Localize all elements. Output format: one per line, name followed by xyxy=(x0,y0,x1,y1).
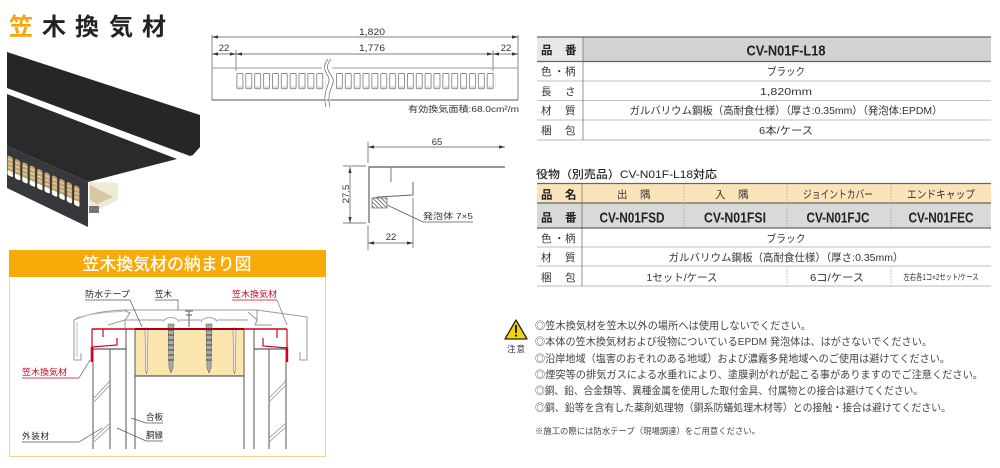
label: exterior: 外装材 xyxy=(22,431,49,441)
dimension drawing: section xyxy=(341,137,505,250)
product photo xyxy=(7,52,200,227)
effective vent area: 有効換気面積:68.0cm²/m xyxy=(408,104,519,114)
screws and nails xyxy=(145,324,236,374)
table: accessories heading: 役物（別売品）CV-N01F-L18対応 xyxy=(536,167,717,181)
title: 気 xyxy=(109,14,133,41)
dimension drawing: section: 発泡体 7×5 xyxy=(423,211,473,221)
table: main product spec: ブラック xyxy=(767,65,805,78)
caution notes: ◎沿岸地域（塩害のおそれのある地域）および濃霧多発地域へのご使用は避けてください。 xyxy=(535,352,950,365)
dimension drawing: section: 27.5 xyxy=(341,185,352,203)
table: main product spec: 番 xyxy=(565,44,577,57)
table: accessories: 隅 xyxy=(640,189,650,201)
table: main product spec: 6本/ケース xyxy=(759,124,813,137)
icon: caution triangle: 注意 xyxy=(507,344,525,354)
caution notes: ◎本体の笠木換気材および役物についているEPDM 発泡体は、はがさないでください。 xyxy=(535,335,932,348)
table: main product spec: 材 xyxy=(541,104,552,117)
panel heading: 笠木換気材の納まり図 xyxy=(82,255,252,274)
caution notes: ◎煙突等の排気ガスによる水垂れにより、塗膜剥がれが起こる事がありますのでご注意ください。 xyxy=(535,368,983,381)
table: main product spec: 品 xyxy=(541,44,552,57)
table: accessories: 番 xyxy=(565,212,577,224)
caution notes: ◎銅、鉛、合金類等、異種金属を使用した取付金具、付属物との接合は避けてください。 xyxy=(535,384,923,397)
panel heading xyxy=(9,250,326,277)
dimension drawing: top view: 1,820 xyxy=(359,27,385,38)
label: plywood: 合板 xyxy=(146,412,164,422)
table: main product spec xyxy=(537,37,991,140)
title: 材 xyxy=(142,14,166,41)
caution notes: ◎笠木換気材を笠木以外の場所へは使用しないでください。 xyxy=(535,319,811,332)
caution notes xyxy=(535,319,983,414)
label: vent member right: 笠木換気材 xyxy=(232,289,278,299)
panel: installation diagram xyxy=(9,250,326,456)
table: accessories: CV-N01FEC xyxy=(908,210,974,226)
table: accessories: 材 xyxy=(541,251,552,264)
red vent member xyxy=(92,329,287,362)
table: main product spec: 長 xyxy=(541,86,552,98)
table: accessories: 包 xyxy=(565,271,576,284)
table: accessories xyxy=(537,183,991,286)
icon: caution triangle xyxy=(505,320,527,354)
table: accessories: ガルバリウム鋼板（高耐食仕様）（厚さ:0.35mm） xyxy=(668,251,904,264)
table: accessories: ジョイントカバー xyxy=(803,188,873,201)
label: vent member left: 笠木換気材 xyxy=(22,367,68,377)
table: accessories: ブラック xyxy=(766,232,806,245)
table: main product spec: 色 xyxy=(541,66,552,78)
title: 木 xyxy=(42,14,66,41)
table: accessories: ・ xyxy=(554,233,564,245)
footnote: ※施工の際には防水テープ（現場調達）をご用意ください。 xyxy=(535,426,760,436)
table: accessories: 出 xyxy=(617,189,628,201)
table: accessories: CV-N01FSD xyxy=(600,210,665,226)
table: main product spec: ・ xyxy=(554,66,564,78)
dimension drawing: top view: 22 xyxy=(219,43,229,54)
title: 換 xyxy=(75,14,99,41)
dimension drawing: section: 65 xyxy=(432,137,442,148)
dimension drawing: section: 22 xyxy=(386,232,396,243)
dimension drawing: top view: 22 xyxy=(501,43,511,54)
dimension drawing: top view: 1,776 xyxy=(359,43,385,54)
table: accessories: CV-N01FSI xyxy=(704,210,766,226)
table: main product spec: 梱 xyxy=(541,124,552,137)
table: accessories: 6コ/ケース xyxy=(810,272,864,284)
table: main product spec: CV-N01F-L18 xyxy=(746,42,826,60)
table: accessories: 梱 xyxy=(541,271,552,284)
table: main product spec: 質 xyxy=(565,104,576,117)
dimension drawing: top view xyxy=(212,27,519,114)
table: accessories: 入 xyxy=(715,189,726,201)
table: accessories: 1セット/ケース xyxy=(646,272,718,284)
table: accessories: 質 xyxy=(565,251,576,264)
caution notes: ◎銅、鉛等を含有した薬剤処理物（銅系防蟻処理木材等）との接触・接合は避けてください。 xyxy=(535,401,951,414)
table: accessories: 柄 xyxy=(565,232,576,245)
label: furring: 胴縁 xyxy=(146,430,164,440)
label: waterproof tape: 防水テープ xyxy=(85,289,131,299)
table: main product spec: 1,820mm xyxy=(760,86,812,98)
leader lines xyxy=(22,300,287,442)
wood block xyxy=(135,330,244,376)
table: accessories: 隅 xyxy=(738,189,748,201)
table: main product spec: ガルバリウム鋼板（高耐食仕様）（厚さ:0.35mm）（発泡体:EPDM） xyxy=(630,104,942,117)
table: accessories: CV-N01FJC xyxy=(806,210,870,226)
table: accessories: 名 xyxy=(565,188,576,202)
table: main product spec: 包 xyxy=(565,124,576,137)
label: coping: 笠木 xyxy=(155,289,173,299)
title: 笠 xyxy=(9,14,33,41)
table: main product spec: 柄 xyxy=(565,65,576,78)
table: accessories: 品 xyxy=(541,188,552,202)
roof cap outline xyxy=(74,310,307,360)
title xyxy=(9,14,166,41)
wall and cap lines xyxy=(93,329,286,449)
table: accessories: 色 xyxy=(541,233,552,245)
table: accessories: エンドキャップ xyxy=(907,188,975,201)
table: accessories: 品 xyxy=(541,212,552,224)
table: main product spec: さ xyxy=(565,86,576,98)
